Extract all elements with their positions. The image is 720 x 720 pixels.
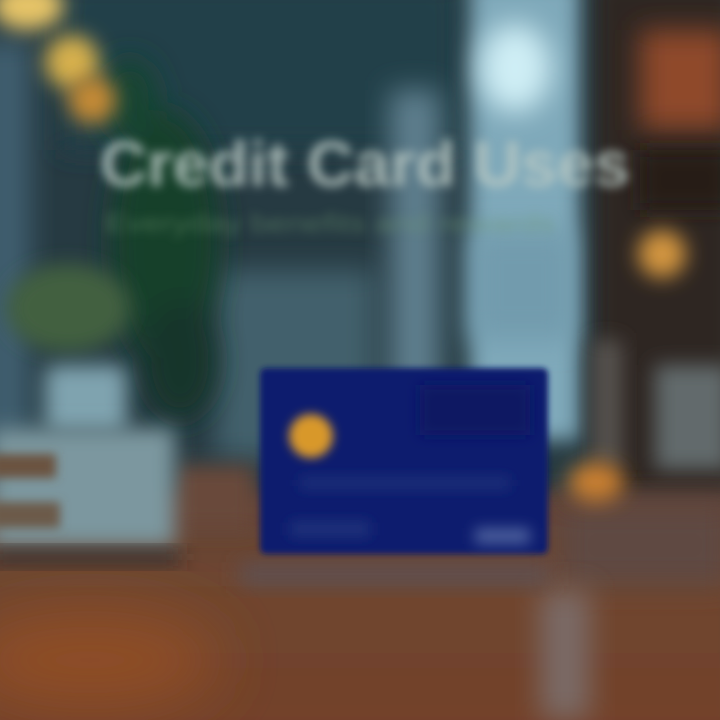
subtitle: Everyday benefits and rewards [105, 208, 555, 238]
potted plant [6, 264, 130, 352]
bokeh lights [0, 0, 686, 502]
stack of books [0, 428, 180, 564]
credit card [260, 368, 548, 554]
window light [470, 0, 580, 440]
background plant [102, 58, 220, 420]
right shelf [592, 0, 720, 500]
title: Credit Card Uses [100, 128, 630, 200]
card detail highlights [290, 385, 530, 544]
card chip [289, 414, 333, 458]
table [0, 490, 720, 720]
white pot [45, 365, 127, 433]
